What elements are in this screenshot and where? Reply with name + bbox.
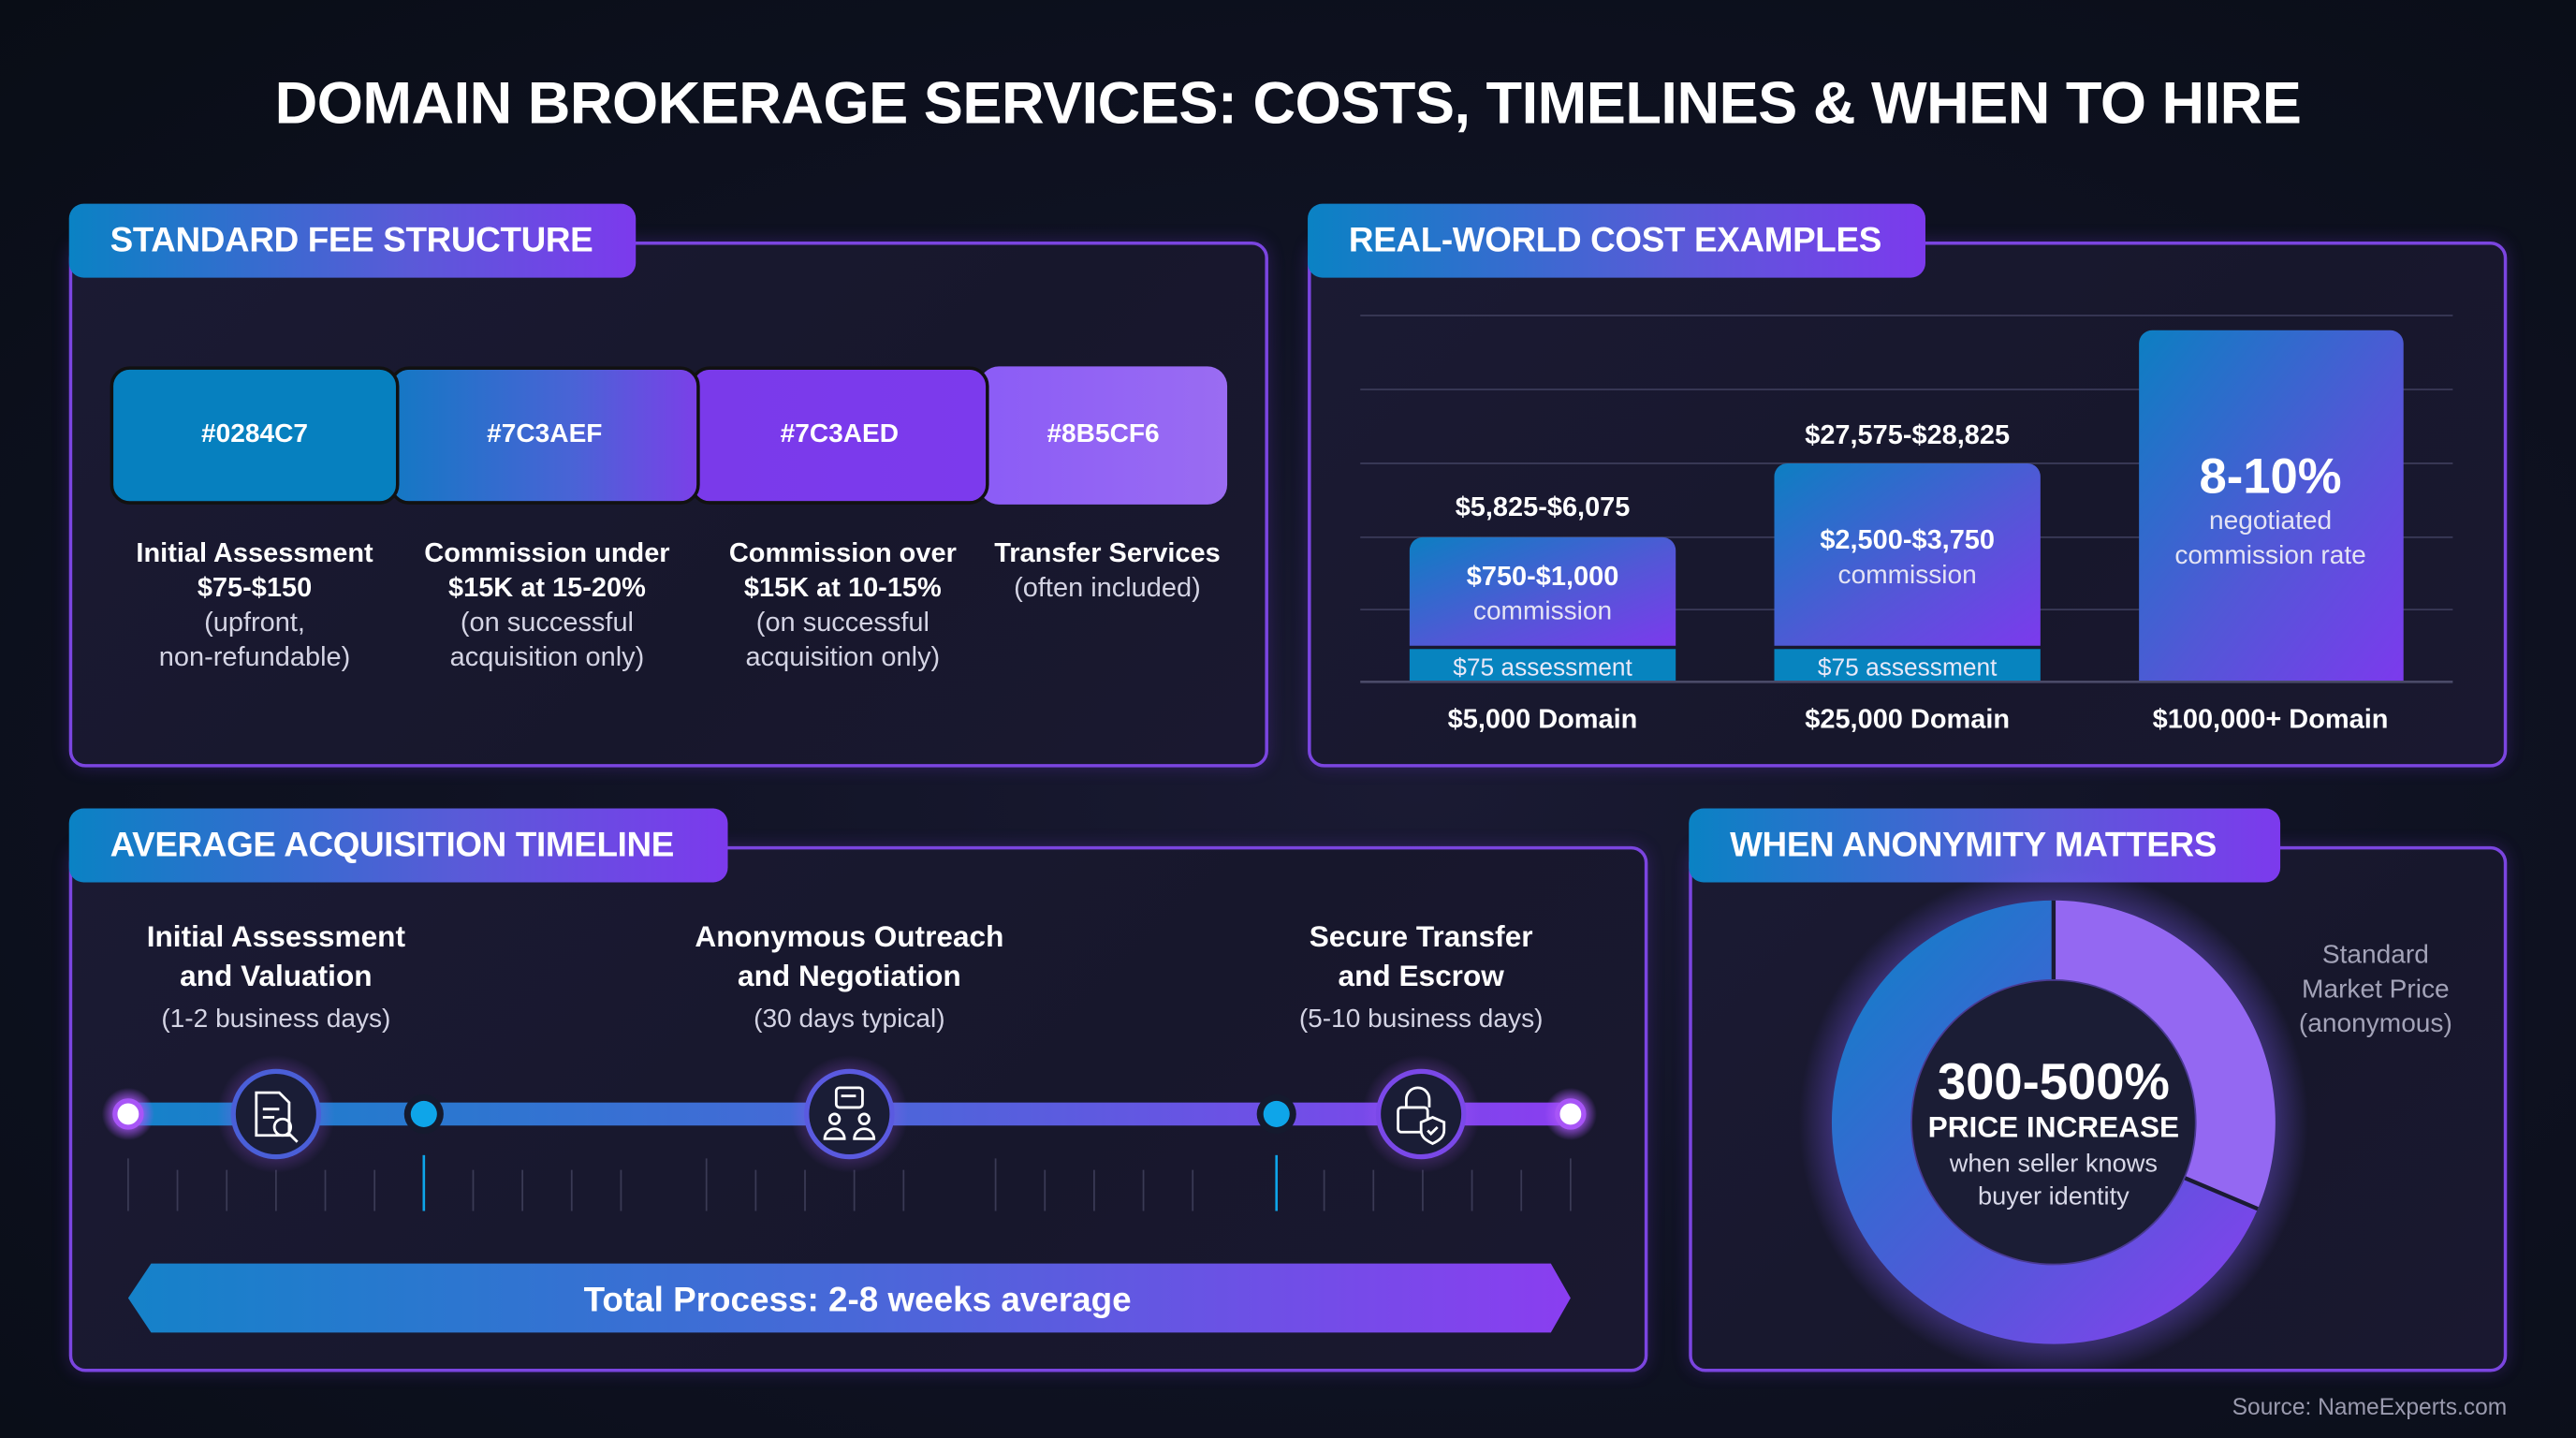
label: commission under 15k: (on successful bbox=[461, 608, 634, 638]
label: standard market price: Standard bbox=[2322, 942, 2429, 970]
step 1 text: and Valuation bbox=[180, 960, 373, 992]
bar: $100,000+ domain: $100,000+ Domain bbox=[2153, 705, 2388, 735]
bar: $5,000 domain: commission bbox=[1473, 596, 1612, 625]
bar: $100,000+ domain: 8-10% bbox=[2199, 449, 2342, 505]
step 1 text: (1-2 business days) bbox=[161, 1005, 390, 1034]
label: commission under 15k: $15K at 15-20% bbox=[448, 574, 646, 603]
label: standard market price: Market Price bbox=[2302, 976, 2450, 1004]
step 2 text: and Negotiation bbox=[738, 960, 961, 992]
icon: people chat bbox=[790, 1055, 909, 1173]
heading: when anonymity matters bbox=[1689, 809, 2280, 882]
segment 1 bbox=[110, 366, 399, 505]
segment 2 bbox=[389, 366, 700, 505]
end dots bbox=[102, 1088, 1597, 1140]
center text: buyer identity bbox=[1978, 1181, 2130, 1210]
panel: average acquisition timeline bbox=[69, 846, 1647, 1372]
title: DOMAIN BROKERAGE SERVICES: COSTS, TIMELINES & WHEN TO HIRE bbox=[275, 69, 2301, 137]
segment 4: #8B5CF6 bbox=[1046, 420, 1160, 448]
timeline bbox=[103, 1058, 1596, 1333]
step 1 text: Initial Assessment bbox=[147, 920, 405, 953]
label: commission under 15k: acquisition only) bbox=[450, 642, 644, 672]
label: commission under 15k bbox=[424, 539, 670, 672]
bar: $5,000 domain: $5,000 Domain bbox=[1448, 705, 1637, 735]
center text bbox=[1928, 1053, 2179, 1210]
step 1 text bbox=[147, 920, 405, 1034]
step 3 text bbox=[1299, 920, 1543, 1034]
banner: total process bbox=[128, 1264, 1571, 1332]
step 2 text bbox=[695, 920, 1003, 1034]
heading: average acquisition timeline bbox=[69, 809, 728, 882]
bar: $25,000 domain: $2,500-$3,750 bbox=[1820, 525, 1995, 555]
bar: $25,000 domain: $25,000 Domain bbox=[1805, 705, 2010, 735]
segment 4 bbox=[979, 366, 1227, 505]
label: standard market price: (anonymous) bbox=[2299, 1010, 2452, 1038]
donut segment: standard market price bbox=[2054, 901, 2276, 1209]
donut chart bbox=[1803, 882, 2305, 1369]
bar: $25,000 domain bbox=[1775, 420, 2041, 735]
bar: $5,000 domain: $750-$1,000 bbox=[1467, 562, 1618, 592]
heading: real-world cost examples: REAL-WORLD COST EXAMPLES bbox=[1349, 222, 1881, 259]
bar: $25,000 domain: commission bbox=[1838, 560, 1977, 589]
label: transfer services: Transfer Services bbox=[994, 539, 1221, 568]
bar: $5,000 domain: $5,825-$6,075 bbox=[1456, 492, 1630, 522]
label: commission under 15k: Commission under bbox=[424, 539, 670, 568]
bar: $25,000 domain: $27,575-$28,825 bbox=[1805, 420, 2010, 450]
bar: $100,000+ domain: negotiated bbox=[2209, 506, 2332, 535]
heading: when anonymity matters: WHEN ANONYMITY MATTERS bbox=[1730, 827, 2217, 864]
icon: document search bbox=[217, 1055, 335, 1173]
banner: total process: Total Process: 2-8 weeks average bbox=[584, 1281, 1132, 1319]
label: standard market price bbox=[2299, 942, 2452, 1038]
bar: $5,000 domain: $75 assessment bbox=[1453, 653, 1633, 681]
center text: when seller knows bbox=[1949, 1148, 2158, 1177]
heading: average acquisition timeline: AVERAGE ACQUISITION TIMELINE bbox=[110, 827, 674, 864]
step 3 text: (5-10 business days) bbox=[1299, 1005, 1543, 1034]
donut segment: price increase bbox=[1832, 901, 2258, 1344]
label: transfer services: (often included) bbox=[1014, 574, 1201, 603]
center text: 300-500% bbox=[1938, 1053, 2170, 1110]
segment 3: #7C3AED bbox=[781, 420, 899, 448]
bar: $5,000 domain bbox=[1410, 492, 1676, 735]
label: initial assessment: (upfront, bbox=[204, 608, 305, 638]
icon: lock shield bbox=[1362, 1055, 1480, 1173]
step 2 text: Anonymous Outreach bbox=[695, 920, 1003, 953]
segment 1: #0284C7 bbox=[201, 420, 308, 448]
label: initial assessment bbox=[136, 539, 373, 672]
label: commission over 15k: $15K at 10-15% bbox=[744, 574, 942, 603]
step 3 text: and Escrow bbox=[1339, 960, 1504, 992]
center text: PRICE INCREASE bbox=[1928, 1110, 2179, 1144]
milestone dots bbox=[404, 1094, 1296, 1134]
segment 2: #7C3AEF bbox=[487, 420, 602, 448]
heading: real-world cost examples bbox=[1308, 204, 1925, 278]
panel: when anonymity matters bbox=[1689, 846, 2507, 1372]
bar: $25,000 domain: $75 assessment bbox=[1818, 653, 1998, 681]
segment 3 bbox=[690, 366, 989, 505]
step 3 text: Secure Transfer bbox=[1310, 920, 1533, 953]
bar chart bbox=[1360, 315, 2452, 735]
panel: standard fee structure bbox=[69, 242, 1268, 768]
panel: real-world cost examples bbox=[1308, 242, 2507, 768]
bar: $100,000+ domain bbox=[2139, 330, 2404, 735]
step 2 text: (30 days typical) bbox=[754, 1005, 945, 1034]
label: initial assessment: $75-$150 bbox=[198, 574, 312, 603]
label: transfer services bbox=[994, 539, 1221, 603]
label: commission over 15k bbox=[729, 539, 957, 672]
label: commission over 15k: (on successful bbox=[756, 608, 929, 638]
label: initial assessment: Initial Assessment bbox=[136, 539, 373, 568]
label: initial assessment: non-refundable) bbox=[159, 642, 350, 672]
bar: $100,000+ domain: commission rate bbox=[2174, 540, 2366, 569]
fee bar bbox=[110, 366, 1228, 505]
source: Source: NameExperts.com bbox=[2232, 1393, 2507, 1419]
label: commission over 15k: acquisition only) bbox=[746, 642, 940, 672]
heading: standard fee structure: STANDARD FEE STRUCTURE bbox=[110, 222, 593, 259]
label: commission over 15k: Commission over bbox=[729, 539, 957, 568]
heading: standard fee structure bbox=[69, 204, 636, 278]
